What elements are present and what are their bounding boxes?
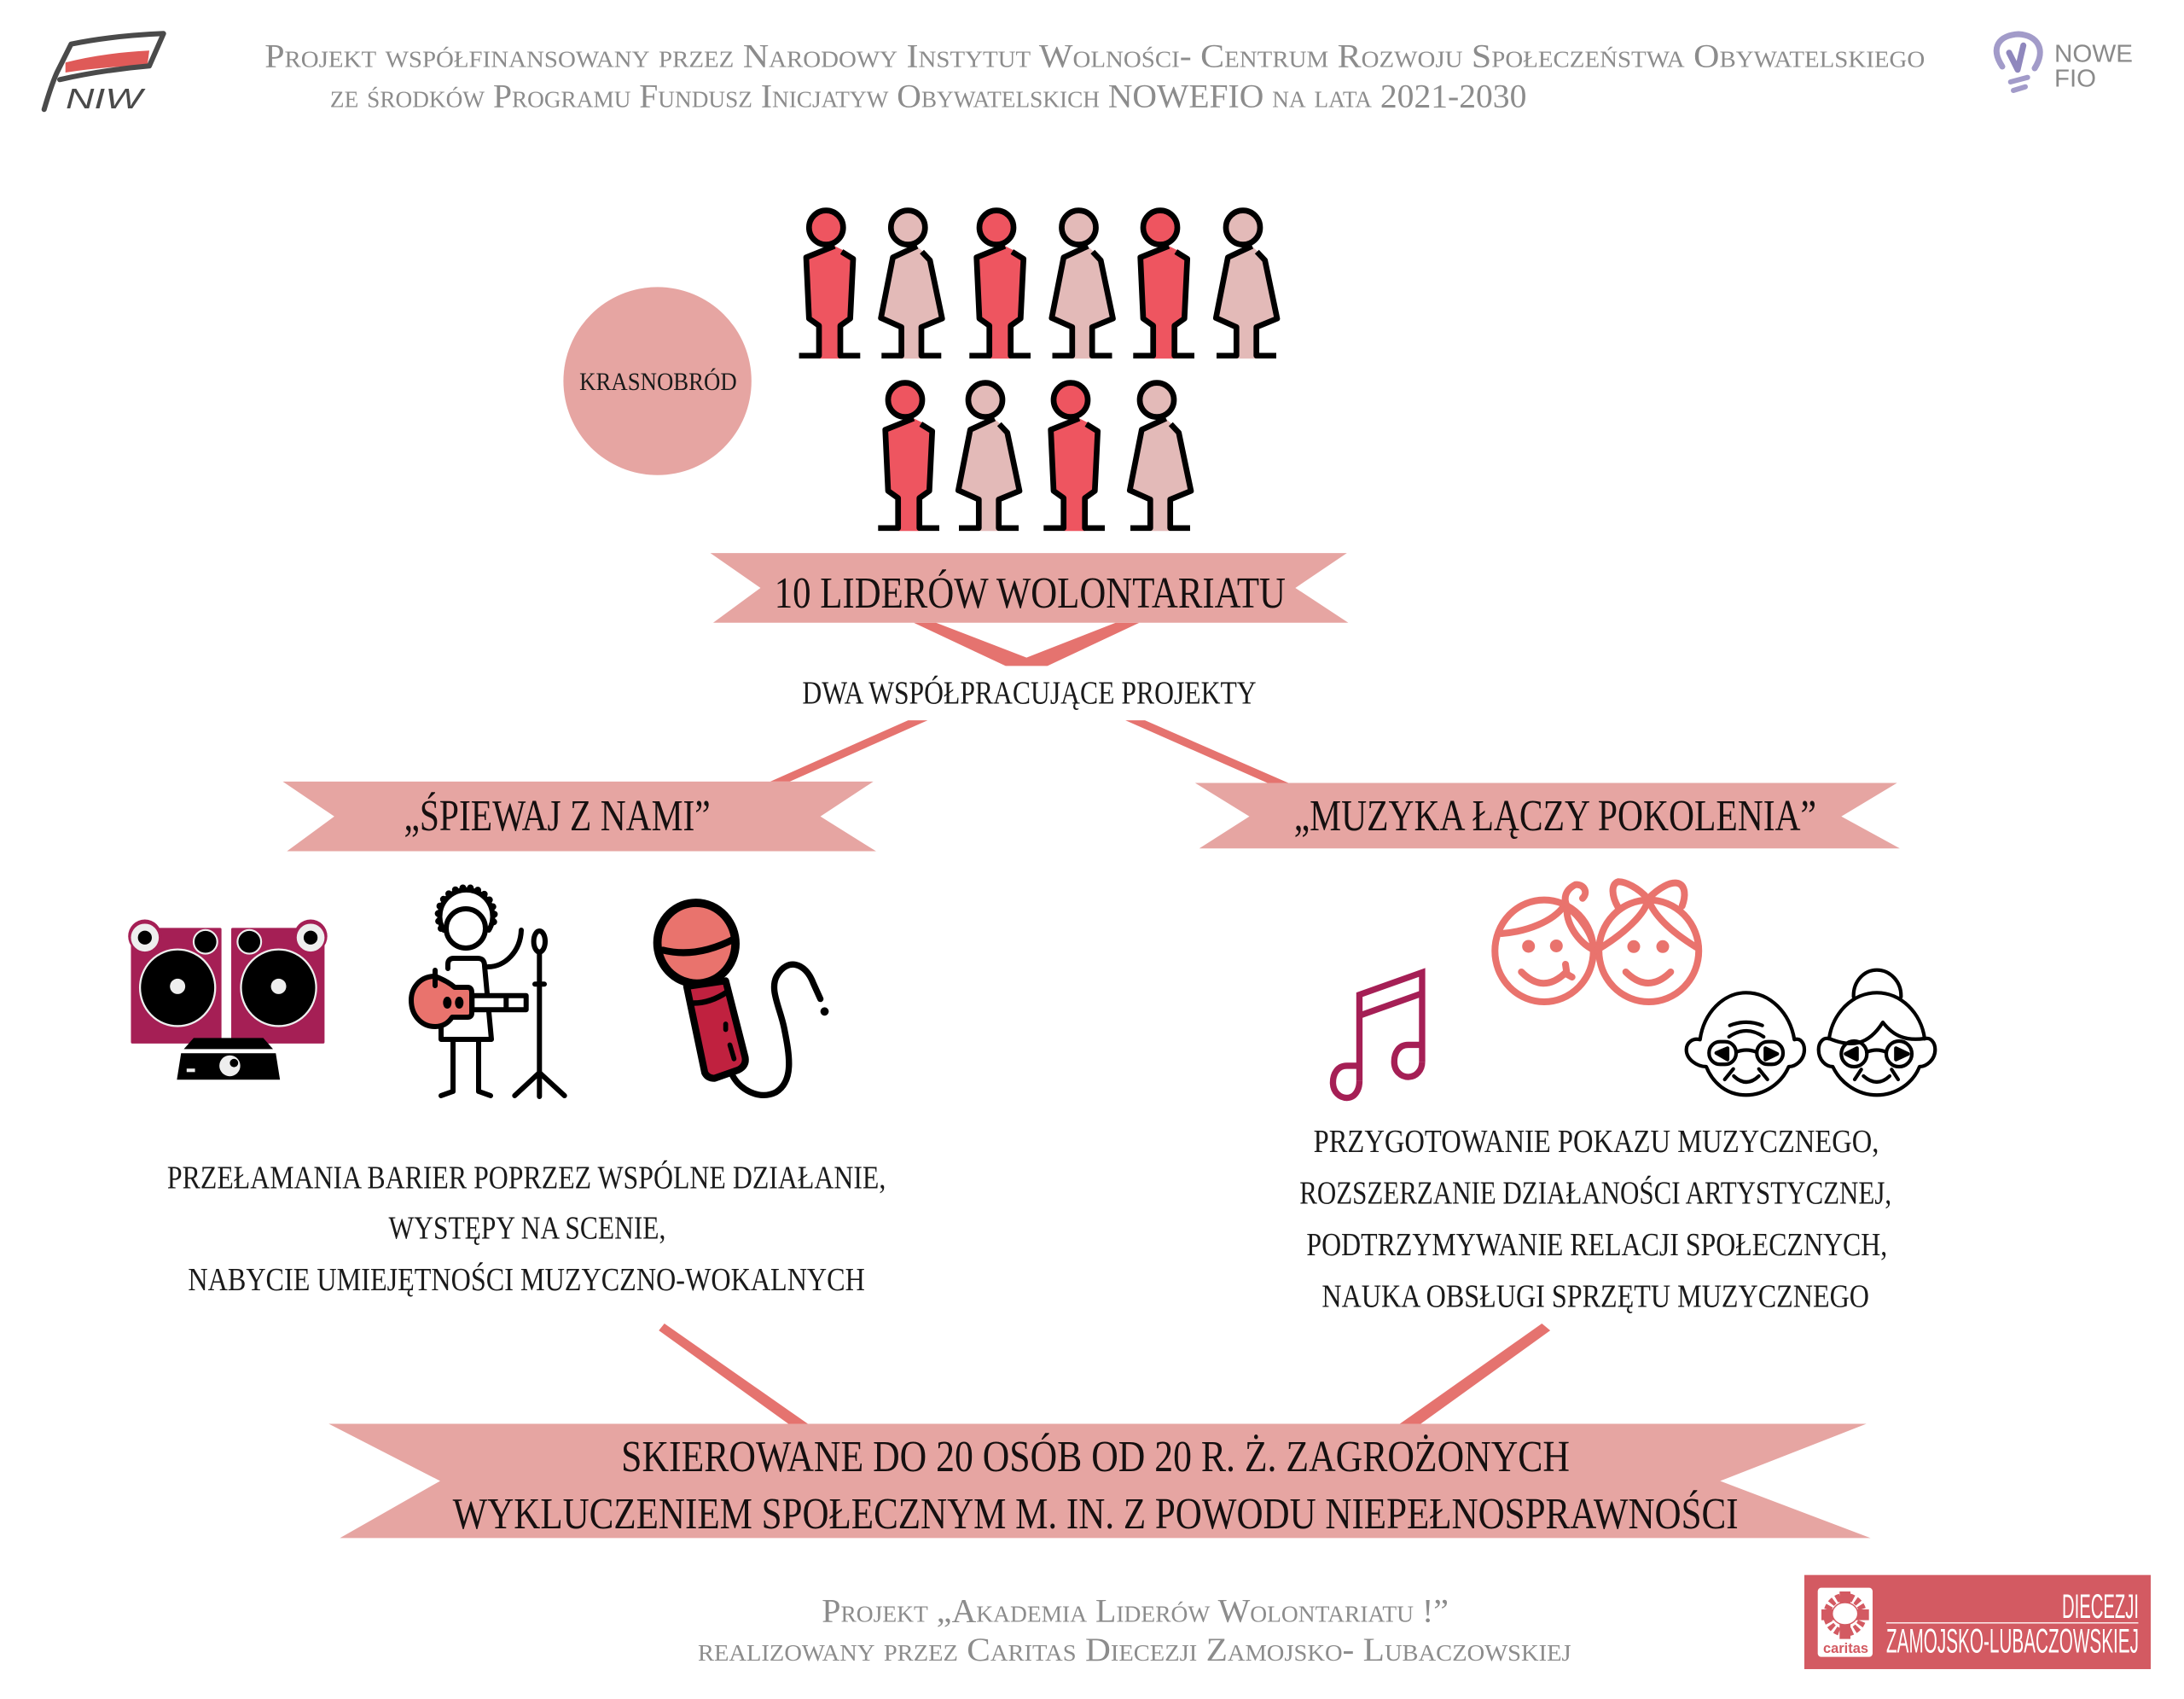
ribbon: 10 liderów wolontariatu — [711, 553, 1348, 623]
connector: to left project — [770, 720, 927, 782]
text: left project description: PRZEŁAMANIA BARIER POPRZEZ WSPÓLNE DZIAŁANIE, — [167, 1161, 886, 1196]
ribbon: Śpiewaj z nami — [282, 782, 876, 852]
icon: microphone — [651, 897, 827, 1095]
text: two cooperating projects: DWA WSPÓŁPRACUJĄCE PROJEKTY — [802, 675, 1257, 711]
logo: NIW: NIW — [66, 83, 146, 114]
ribbon: target audience: SKIEROWANE DO 20 OSÓB OD 20 R. Ż. ZAGROŻONYCH — [621, 1432, 1570, 1481]
text: right project description: NAUKA OBSŁUGI SPRZĘTU MUZYCZNEGO — [1321, 1279, 1869, 1314]
connector: left project to audience — [659, 1324, 808, 1424]
location circle: Krasnobród — [563, 287, 752, 475]
connector: to right project — [1125, 720, 1288, 783]
ribbon: target audience: WYKLUCZENIEM SPOŁECZNYM M. IN. Z POWODU NIEPEŁNOSPRAWNOŚCI — [453, 1489, 1739, 1539]
logo: Nowe FIO: NOWE — [2054, 40, 2133, 67]
text: right project description: ROZSZERZANIE DZIAŁANOŚCI ARTYSTYCZNEJ, — [1299, 1176, 1891, 1212]
location circle: Krasnobród: KRASNOBRÓD — [579, 368, 737, 396]
header text: Projekt współfinansowany przez Narodowy Instytut Wolności- Centrum Rozwoju Społeczeństwa Obywatelskiego — [264, 38, 1925, 74]
connector: leaders to projects — [914, 623, 1140, 666]
footer text: Projekt „Akademia Liderów Wolontariatu !” — [822, 1592, 1449, 1629]
header text: ze środków Programu Fundusz Inicjatyw Obywatelskich NOWEFIO na lata 2021-2030 — [330, 79, 1526, 115]
ribbon: 10 liderów wolontariatu: 10 LIDERÓW WOLONTARIATU — [775, 568, 1286, 618]
logo: Caritas diocese: caritas — [1823, 1640, 1868, 1656]
ribbon: Śpiewaj z nami: „ŚPIEWAJ Z NAMI” — [404, 791, 711, 841]
connector: right project to audience — [1400, 1324, 1550, 1424]
text: left project description — [167, 1161, 886, 1298]
text: right project description: PRZYGOTOWANIE POKAZU MUZYCZNEGO, — [1314, 1125, 1879, 1160]
icon: grandfather and grandmother faces — [1687, 970, 1935, 1095]
ribbon: Muzyka łączy pokolenia: „MUZYKA ŁĄCZY POKOLENIA” — [1294, 791, 1816, 841]
logo: Nowe FIO: FIO — [2054, 66, 2096, 93]
icons: group of ten people — [799, 211, 1277, 531]
logo: Nowe FIO — [1996, 34, 2133, 93]
footer text — [698, 1592, 1571, 1668]
icon: two children faces — [1495, 882, 1699, 1002]
text: left project description: NABYCIE UMIEJĘTNOŚCI MUZYCZNO-WOKALNYCH — [188, 1262, 865, 1298]
text: left project description: WYSTĘPY NA SCENIE, — [389, 1211, 665, 1246]
footer text: realizowany przez Caritas Diecezji Zamojsko- Lubaczowskiej — [698, 1632, 1571, 1668]
ribbon: Muzyka łączy pokolenia — [1195, 783, 1900, 848]
text: right project description — [1299, 1125, 1891, 1314]
logo: Caritas diocese — [1804, 1575, 2151, 1669]
text: right project description: PODTRZYMYWANIE RELACJI SPOŁECZNYCH, — [1306, 1228, 1887, 1263]
icon: singer with guitar — [411, 887, 565, 1097]
logo: NIW — [44, 33, 164, 114]
ribbon: target audience — [328, 1424, 1871, 1539]
icon: music note — [1333, 973, 1422, 1098]
icon: speakers and mixer — [128, 920, 328, 1079]
header text — [264, 38, 1925, 115]
